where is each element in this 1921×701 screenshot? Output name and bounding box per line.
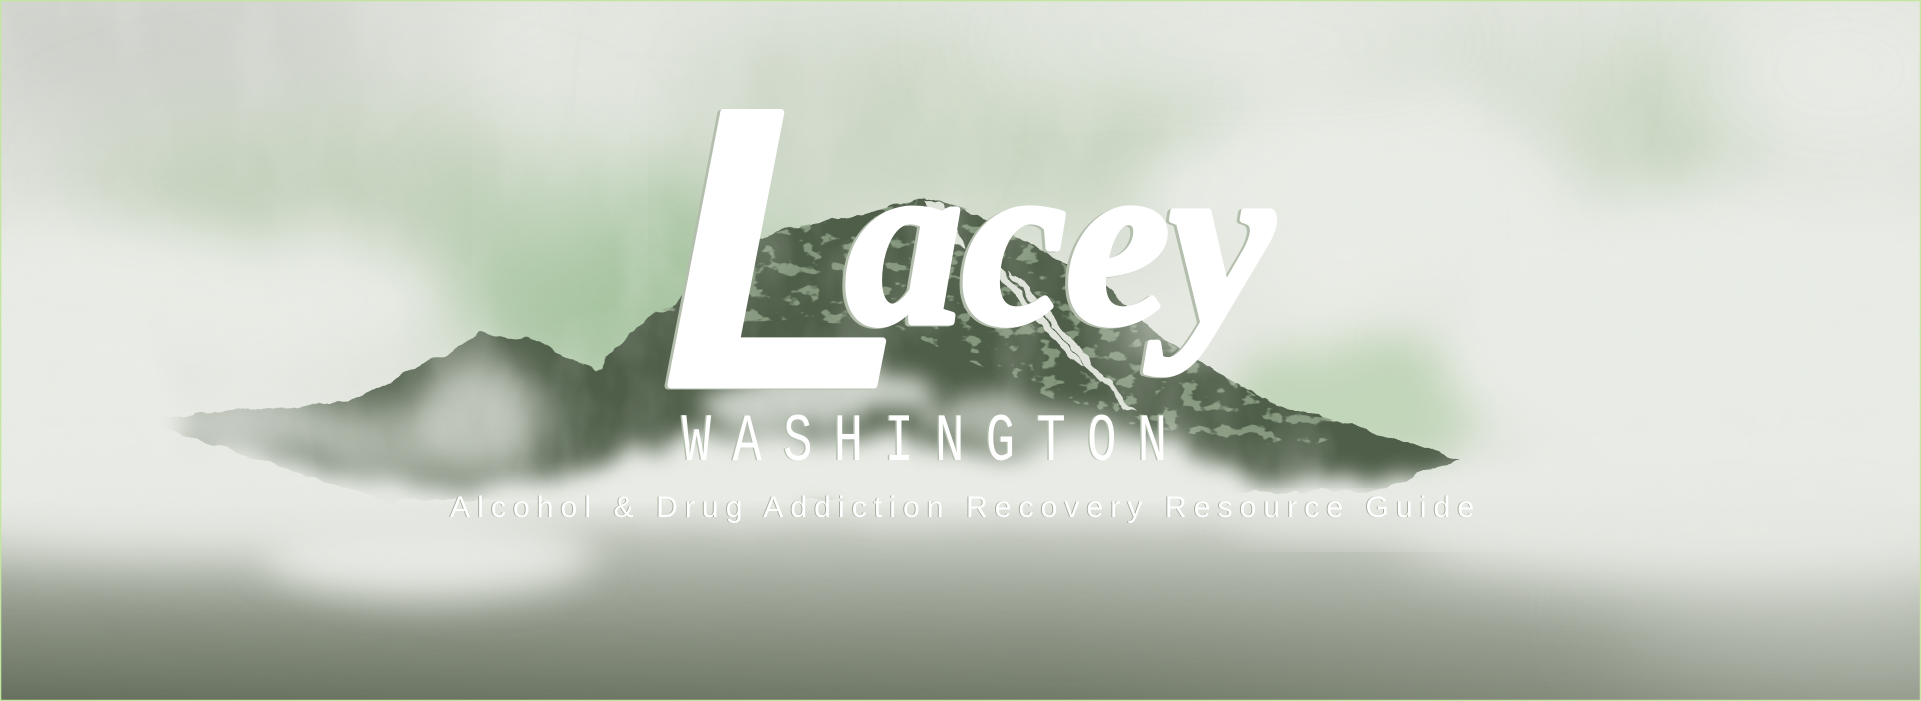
title: Lacey [664,27,1274,469]
title: Lacey: acey [846,108,1274,374]
right bank [1155,95,1585,285]
subtitle: WASHINGTON: WASHINGTON [682,404,1167,481]
mountain [140,197,1460,500]
tagline: Alcohol & Drug Addiction Recovery Resource Guide [450,491,1474,524]
mist over the ridge [110,280,1250,480]
title: Lacey: L [664,27,906,469]
mountain highlights [640,197,1360,450]
mid mist with uneven top [0,430,1921,530]
clouds [0,0,1921,530]
left bank [0,230,430,380]
snow streak [925,199,1135,412]
bottom mist gradient [0,477,1921,701]
